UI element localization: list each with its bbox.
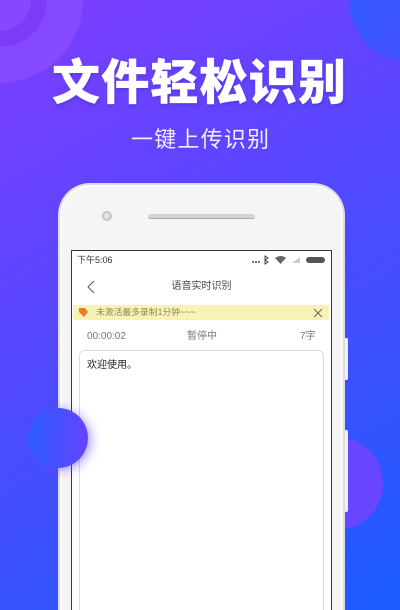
decorative rings top-left — [0, 0, 83, 83]
circle overlapping phone — [28, 408, 88, 468]
close icon — [314, 308, 322, 318]
side button upper — [343, 338, 348, 380]
decorative circle right — [290, 437, 383, 530]
speaker — [148, 214, 255, 219]
decorative circle top-right — [349, 0, 400, 62]
state: 暂停中 — [187, 331, 217, 342]
title: 文件轻松识别 — [52, 57, 347, 110]
screen — [71, 250, 332, 610]
camera — [102, 211, 112, 221]
text card — [79, 350, 324, 610]
subtitle: 一键上传识别 — [131, 127, 270, 152]
timer: 00:00:02 — [87, 331, 126, 342]
card text: 欢迎使用。 — [87, 360, 137, 371]
phone — [58, 183, 345, 610]
char count: 7字 — [300, 331, 316, 342]
notice bar — [73, 305, 329, 320]
notice text: 未激活最多录制1分钟~~~ — [96, 307, 195, 317]
screen heading: 语音实时识别 — [172, 281, 232, 292]
status time: 下午5:06 — [77, 255, 113, 265]
back arrow — [87, 280, 94, 294]
side button lower — [343, 430, 348, 512]
notice icon — [79, 308, 88, 317]
status icons — [252, 255, 325, 265]
